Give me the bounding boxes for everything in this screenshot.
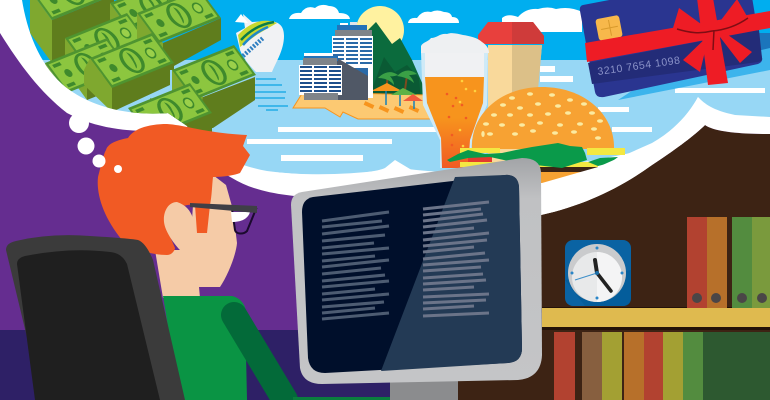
code lines, right column (423, 202, 489, 316)
thought bubble: lower white band over scene (187, 97, 705, 215)
cheese (587, 148, 625, 155)
hair bubble (114, 165, 122, 173)
monitor screen (302, 175, 522, 373)
bookcase backing (458, 125, 770, 400)
lettuce (447, 143, 587, 168)
thought bubble: small puffs (69, 113, 106, 168)
figure: green sweater (163, 296, 247, 400)
upper shelf books (687, 217, 770, 308)
lower shelf books (554, 332, 770, 400)
icon: desk clock (565, 240, 631, 306)
card number: 3210 7654 1098 (597, 54, 681, 78)
glasses lens (232, 209, 256, 234)
icon: stacks of cash (30, 0, 256, 138)
icon: gift credit card (580, 0, 770, 100)
sesame seeds (481, 92, 603, 140)
icon: glass of beer (421, 33, 489, 168)
monitor bezel (291, 158, 542, 384)
monitor stand (390, 380, 458, 400)
glasses temple (190, 203, 257, 213)
card shadow (618, 33, 770, 100)
chip (595, 15, 623, 41)
monitor (291, 158, 542, 384)
icon: mountains and palms (345, 22, 423, 100)
screen glare (381, 175, 522, 371)
thought bubble: white outline (0, 0, 770, 215)
bow (673, 0, 752, 72)
white water lines (247, 66, 765, 161)
floor (0, 330, 770, 400)
icon: sun (356, 6, 404, 54)
ear and hair (98, 124, 250, 255)
ship reflection (254, 78, 288, 111)
icon: island beach (293, 83, 431, 119)
eye (231, 212, 250, 222)
bottom bun (535, 172, 598, 184)
figure: arm (234, 315, 436, 400)
gift ribbon (585, 11, 770, 62)
icon: hamburger (447, 87, 625, 184)
office chair (6, 235, 185, 400)
dream scene: sky and water (22, 0, 770, 174)
shelf (542, 307, 770, 330)
icon: coffee cup (478, 22, 544, 170)
figure: neck and face (155, 175, 237, 298)
white clouds (289, 5, 582, 32)
hand (417, 397, 436, 400)
icon: cruise ship (235, 14, 288, 111)
patty (500, 167, 598, 172)
code lines, left column (322, 212, 389, 319)
icon: hotel towers (299, 22, 373, 100)
card body (580, 0, 762, 97)
tomato (468, 157, 492, 162)
